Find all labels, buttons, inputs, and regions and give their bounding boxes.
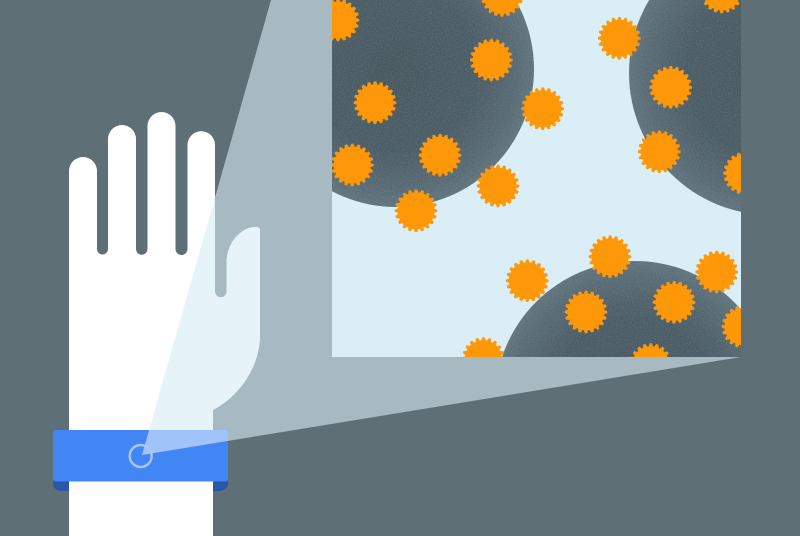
cell: upper left xyxy=(332,0,534,207)
panel: magnified view xyxy=(332,0,741,357)
cell: upper right xyxy=(629,0,741,212)
germ xyxy=(332,0,360,42)
beam over wristband xyxy=(142,430,228,455)
wristband sensor ring xyxy=(130,445,152,467)
panel background xyxy=(332,0,741,357)
cell: lower xyxy=(502,261,741,357)
magnification beam xyxy=(142,0,741,455)
wristband shadow xyxy=(53,478,228,491)
blue wristband xyxy=(53,430,228,482)
beam over hand xyxy=(149,198,260,430)
orange germs xyxy=(332,0,741,357)
icon: white hand xyxy=(69,112,260,536)
